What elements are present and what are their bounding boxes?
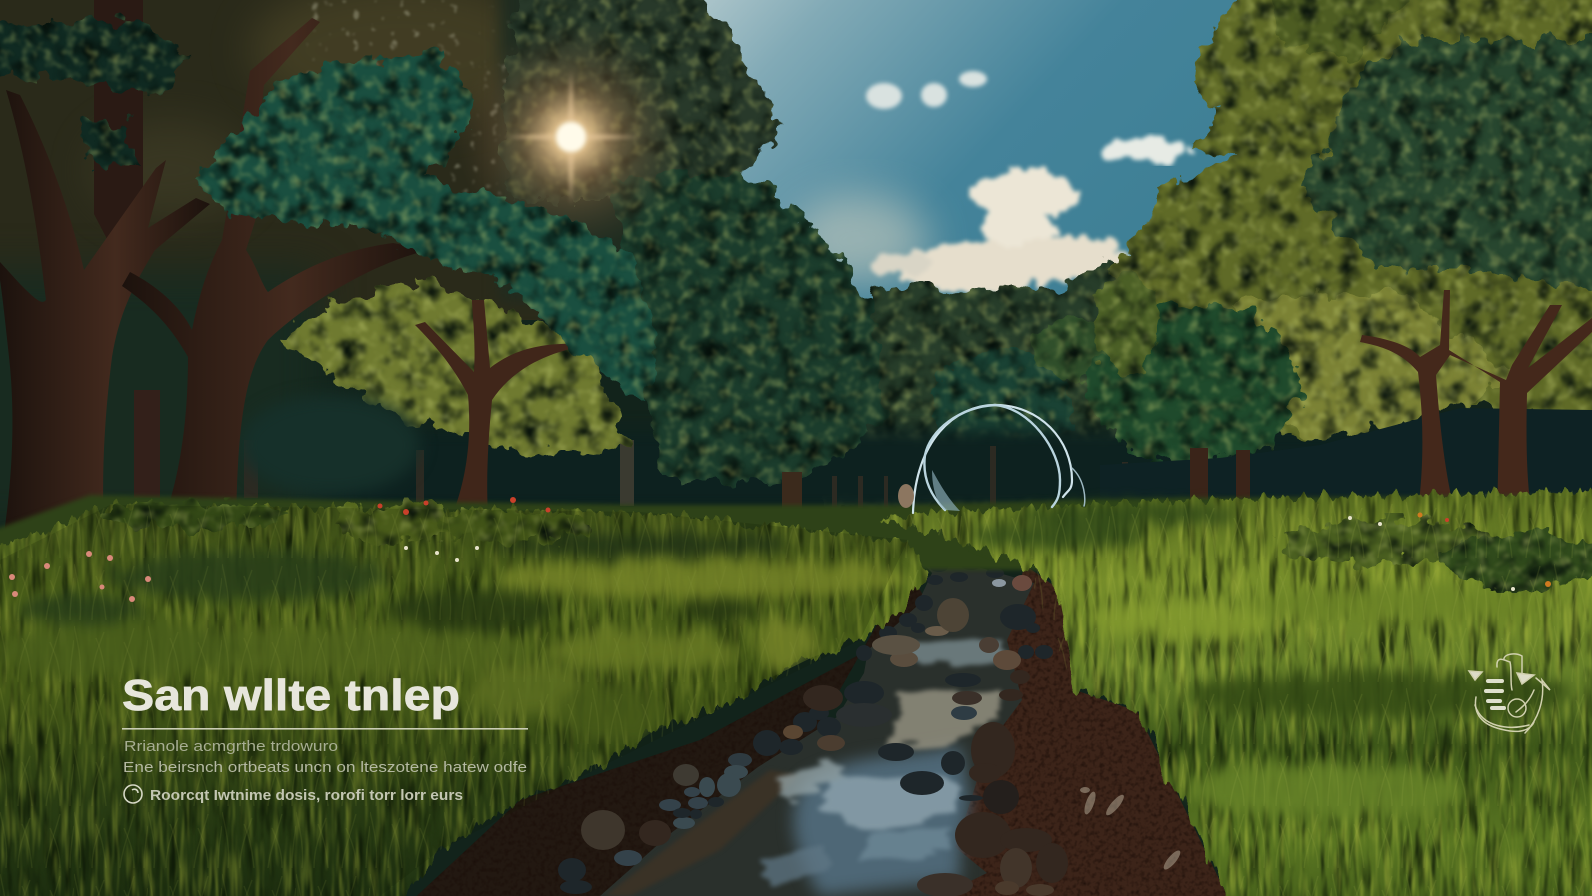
cloud: large cumulus xyxy=(872,169,1127,292)
tree: top-centre canopy xyxy=(502,0,885,480)
caption text line 2: Ene beirsnch ortbeats uncn on lteszotene hatew odfe xyxy=(123,759,527,776)
sun glow xyxy=(456,22,686,252)
shrub with flowers xyxy=(100,502,585,543)
trunk: mid tree xyxy=(415,300,590,516)
trunk: large left tree xyxy=(0,90,210,558)
caption rule xyxy=(122,728,528,730)
stream banks xyxy=(380,565,1244,896)
meadow: far band xyxy=(0,495,1592,570)
caption block xyxy=(122,671,528,804)
tree: right canopies xyxy=(1090,0,1592,525)
water highlights xyxy=(760,640,1005,885)
background treeline xyxy=(820,262,1300,510)
glass ring sculpture xyxy=(898,405,1085,513)
right forest shadow band xyxy=(1100,408,1592,500)
caption heading: San wllte tnlep xyxy=(122,671,460,720)
icon: caption circle xyxy=(124,785,142,803)
cloud: top puffs xyxy=(866,71,987,109)
icon: hand-drawn face emblem xyxy=(1469,654,1550,733)
caption text line 3: Roorcqt Iwtnime dosis, rorofi torr lorr eurs xyxy=(150,787,463,804)
sky with clouds xyxy=(660,0,1280,330)
tree: teal canopy over left trunks xyxy=(0,20,656,404)
tree: background trunks xyxy=(134,390,1560,510)
top-left haze behind canopy xyxy=(0,0,680,530)
trunk: second left tree xyxy=(122,18,430,552)
trunk: back tree xyxy=(94,0,143,260)
meadow: left grass xyxy=(0,502,928,896)
shrubs on the right xyxy=(1282,520,1592,586)
cloud: right small xyxy=(1102,137,1190,161)
tree: sunlit mid tree xyxy=(240,279,634,516)
distant forest band xyxy=(80,430,1592,510)
wildflowers xyxy=(9,497,1551,602)
meadow: right grass xyxy=(880,490,1592,896)
stream rocks xyxy=(558,546,1183,896)
trunk: right trees xyxy=(1360,290,1592,525)
grass blades xyxy=(0,490,1592,896)
stream water xyxy=(600,547,1034,896)
caption text line 1: Rrianole acmgrthe trdowuro xyxy=(124,738,338,755)
